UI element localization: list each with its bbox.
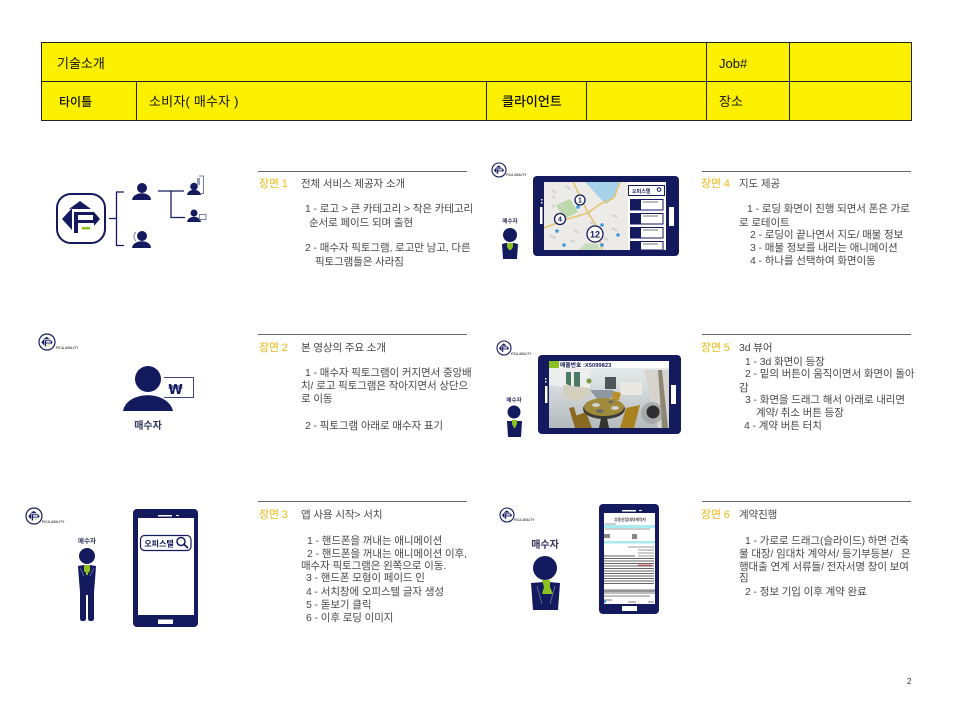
scene 4 illustration: map phone: 4 bbox=[558, 216, 562, 224]
scene 1 text: 1 - 로고 > 큰 카테고리 > 작은 카테고리 bbox=[305, 203, 473, 215]
scene 5 illustration: 3d viewer phone: 매물번호 :X5099823 bbox=[560, 361, 612, 369]
scene 5 text: 감 bbox=[739, 382, 749, 394]
scene 3 text: 장면 3 bbox=[259, 509, 288, 521]
header table: 기술소개 bbox=[57, 56, 105, 71]
scene 2 text: 본 영상의 주요 소개 bbox=[301, 342, 386, 354]
scene 6 text: 2 - 정보 기입 이후 계약 완료 bbox=[745, 586, 867, 598]
header table: 타이틀 bbox=[59, 95, 92, 109]
scene 4 text: 3 - 매물 정보를 내리는 애니메이션 bbox=[750, 242, 898, 254]
scene 5 text: 3 - 화면을 드래그 해서 아래로 내리면 bbox=[745, 394, 905, 406]
scene 2 text: 1 - 매수자 픽토그램이 커지면서 중앙배 bbox=[305, 367, 472, 379]
scene 1 text bbox=[258, 171, 473, 268]
header table: 장소 bbox=[719, 94, 743, 109]
scene 4 illustration: map phone: FICA ABILITY bbox=[506, 173, 527, 177]
header table: 클라이언트 bbox=[502, 94, 562, 109]
scene 5 text: 3d 뷰어 bbox=[739, 342, 772, 354]
scene 4 text bbox=[701, 171, 911, 267]
scene 6 text: 짐 bbox=[739, 572, 749, 584]
scene 5 illustration: 3d viewer phone: FICA ABILITY bbox=[511, 352, 532, 356]
scene 5 text bbox=[701, 334, 914, 432]
scene 5 text: 장면 5 bbox=[701, 342, 730, 354]
scene 5 text: 2 - 밑의 버튼이 움직이면서 화면이 돌아 bbox=[745, 368, 914, 380]
scene 6 text: 행대출 연계 서류들/ 전자서명 창이 보여 bbox=[739, 561, 909, 573]
scene 1 text: 2 - 매수자 픽토그램, 로고만 남고, 다른 bbox=[305, 242, 471, 254]
scene 5 text: 계약/ 취소 버튼 등장 bbox=[756, 407, 844, 419]
scene 4 text: 장면 4 bbox=[701, 178, 730, 190]
scene 3 illustration: phone search: FICA ABILITY bbox=[42, 520, 65, 524]
scene 2 illustration: buyer pictogram: FICA ABILITY bbox=[56, 346, 79, 350]
scene 4 illustration: map phone: 12 bbox=[590, 230, 600, 240]
scene 3 text: 3 - 핸드폰 모형이 페이드 인 bbox=[306, 572, 425, 584]
header table: Job# bbox=[719, 56, 747, 71]
scene 3 text bbox=[258, 501, 467, 624]
scene 2 text bbox=[258, 334, 472, 432]
scene 4 text: 2 - 로딩이 끝나면서 지도/ 매물 정보 bbox=[750, 229, 903, 241]
scene 6 text: 1 - 가로로 드래그(슬라이드) 하면 건축 bbox=[745, 535, 909, 547]
scene 4 text: 로 로테이트 bbox=[739, 217, 790, 229]
scene 1 text: 전체 서비스 제공자 소개 bbox=[301, 178, 405, 190]
scene 4 text: 지도 제공 bbox=[739, 178, 780, 190]
header table bbox=[41, 42, 912, 121]
scene 2 illustration: buyer pictogram: 매수자 bbox=[134, 417, 162, 432]
scene 6 text: 물 대장/ 임대차 계약서/ 등기부등본/ 은 bbox=[739, 548, 911, 560]
scene 6 text: 장면 6 bbox=[701, 509, 730, 521]
scene 3 illustration: phone search: 매수자 bbox=[78, 535, 96, 545]
scene 3 text: 1 - 핸드폰을 꺼내는 애니메이션 bbox=[307, 535, 442, 547]
scene 2 text: 치/ 로고 픽토그램은 작아지면서 상단으 bbox=[301, 380, 468, 392]
scene 6 illustration: contract phone: 매수자 bbox=[531, 536, 559, 551]
page number: 2 bbox=[907, 677, 911, 686]
scene 6 illustration: contract phone: FICA ABILITY bbox=[514, 518, 535, 522]
scene 4 illustration: map phone: 매수자 bbox=[502, 217, 518, 225]
scene 6 text: 계약진행 bbox=[739, 509, 777, 521]
scene 3 illustration: phone search: 오피스텔 bbox=[144, 538, 174, 550]
scene 4 illustration: map phone: 1 bbox=[578, 198, 582, 204]
scene 5 text: 1 - 3d 화면이 등장 bbox=[745, 356, 825, 368]
scene 4 text: 1 - 로딩 화면이 진행 되면서 폰은 가로 bbox=[747, 203, 910, 215]
scene 6 text bbox=[701, 501, 911, 598]
scene 3 text: 2 - 핸드폰을 꺼내는 애니메이션 이후, bbox=[307, 548, 467, 560]
scene 6 illustration: contract phone: 부동산임대차계약서 bbox=[614, 517, 646, 523]
scene 1 text: 픽토그램들은 사라짐 bbox=[315, 256, 404, 268]
scene 4 illustration: map phone: 오피스텔 bbox=[632, 188, 651, 195]
scene 3 text: 6 - 이후 로딩 이미지 bbox=[306, 612, 393, 624]
scene 5 text: 4 - 계약 버튼 터치 bbox=[744, 420, 822, 432]
scene 5 illustration: 3d viewer phone: 매수자 bbox=[506, 396, 522, 404]
scene 3 text: 앱 사용 시작> 서치 bbox=[301, 509, 382, 521]
scene 3 text: 4 - 서치창에 오피스텔 글자 생성 bbox=[306, 586, 444, 598]
header table: 소비자( 매수자 ) bbox=[149, 94, 239, 109]
scene 2 text: 2 - 픽토그램 아래로 매수자 표기 bbox=[305, 420, 443, 432]
scene 4 text: 4 - 하나를 선택하여 화면이동 bbox=[750, 255, 876, 267]
scene 3 text: 5 - 돋보기 클릭 bbox=[306, 599, 371, 611]
scene 2 text: 로 이동 bbox=[301, 393, 332, 405]
scene 1 text: 순서로 페이드 되며 출현 bbox=[309, 217, 413, 229]
scene 2 text: 장면 2 bbox=[259, 342, 288, 354]
scene 1 text: 장면 1 bbox=[259, 178, 288, 190]
scene 3 text: 매수자 픽토그램은 왼쪽으로 이동. bbox=[301, 560, 446, 572]
scene 2 illustration: buyer pictogram: ₩ bbox=[168, 383, 183, 398]
